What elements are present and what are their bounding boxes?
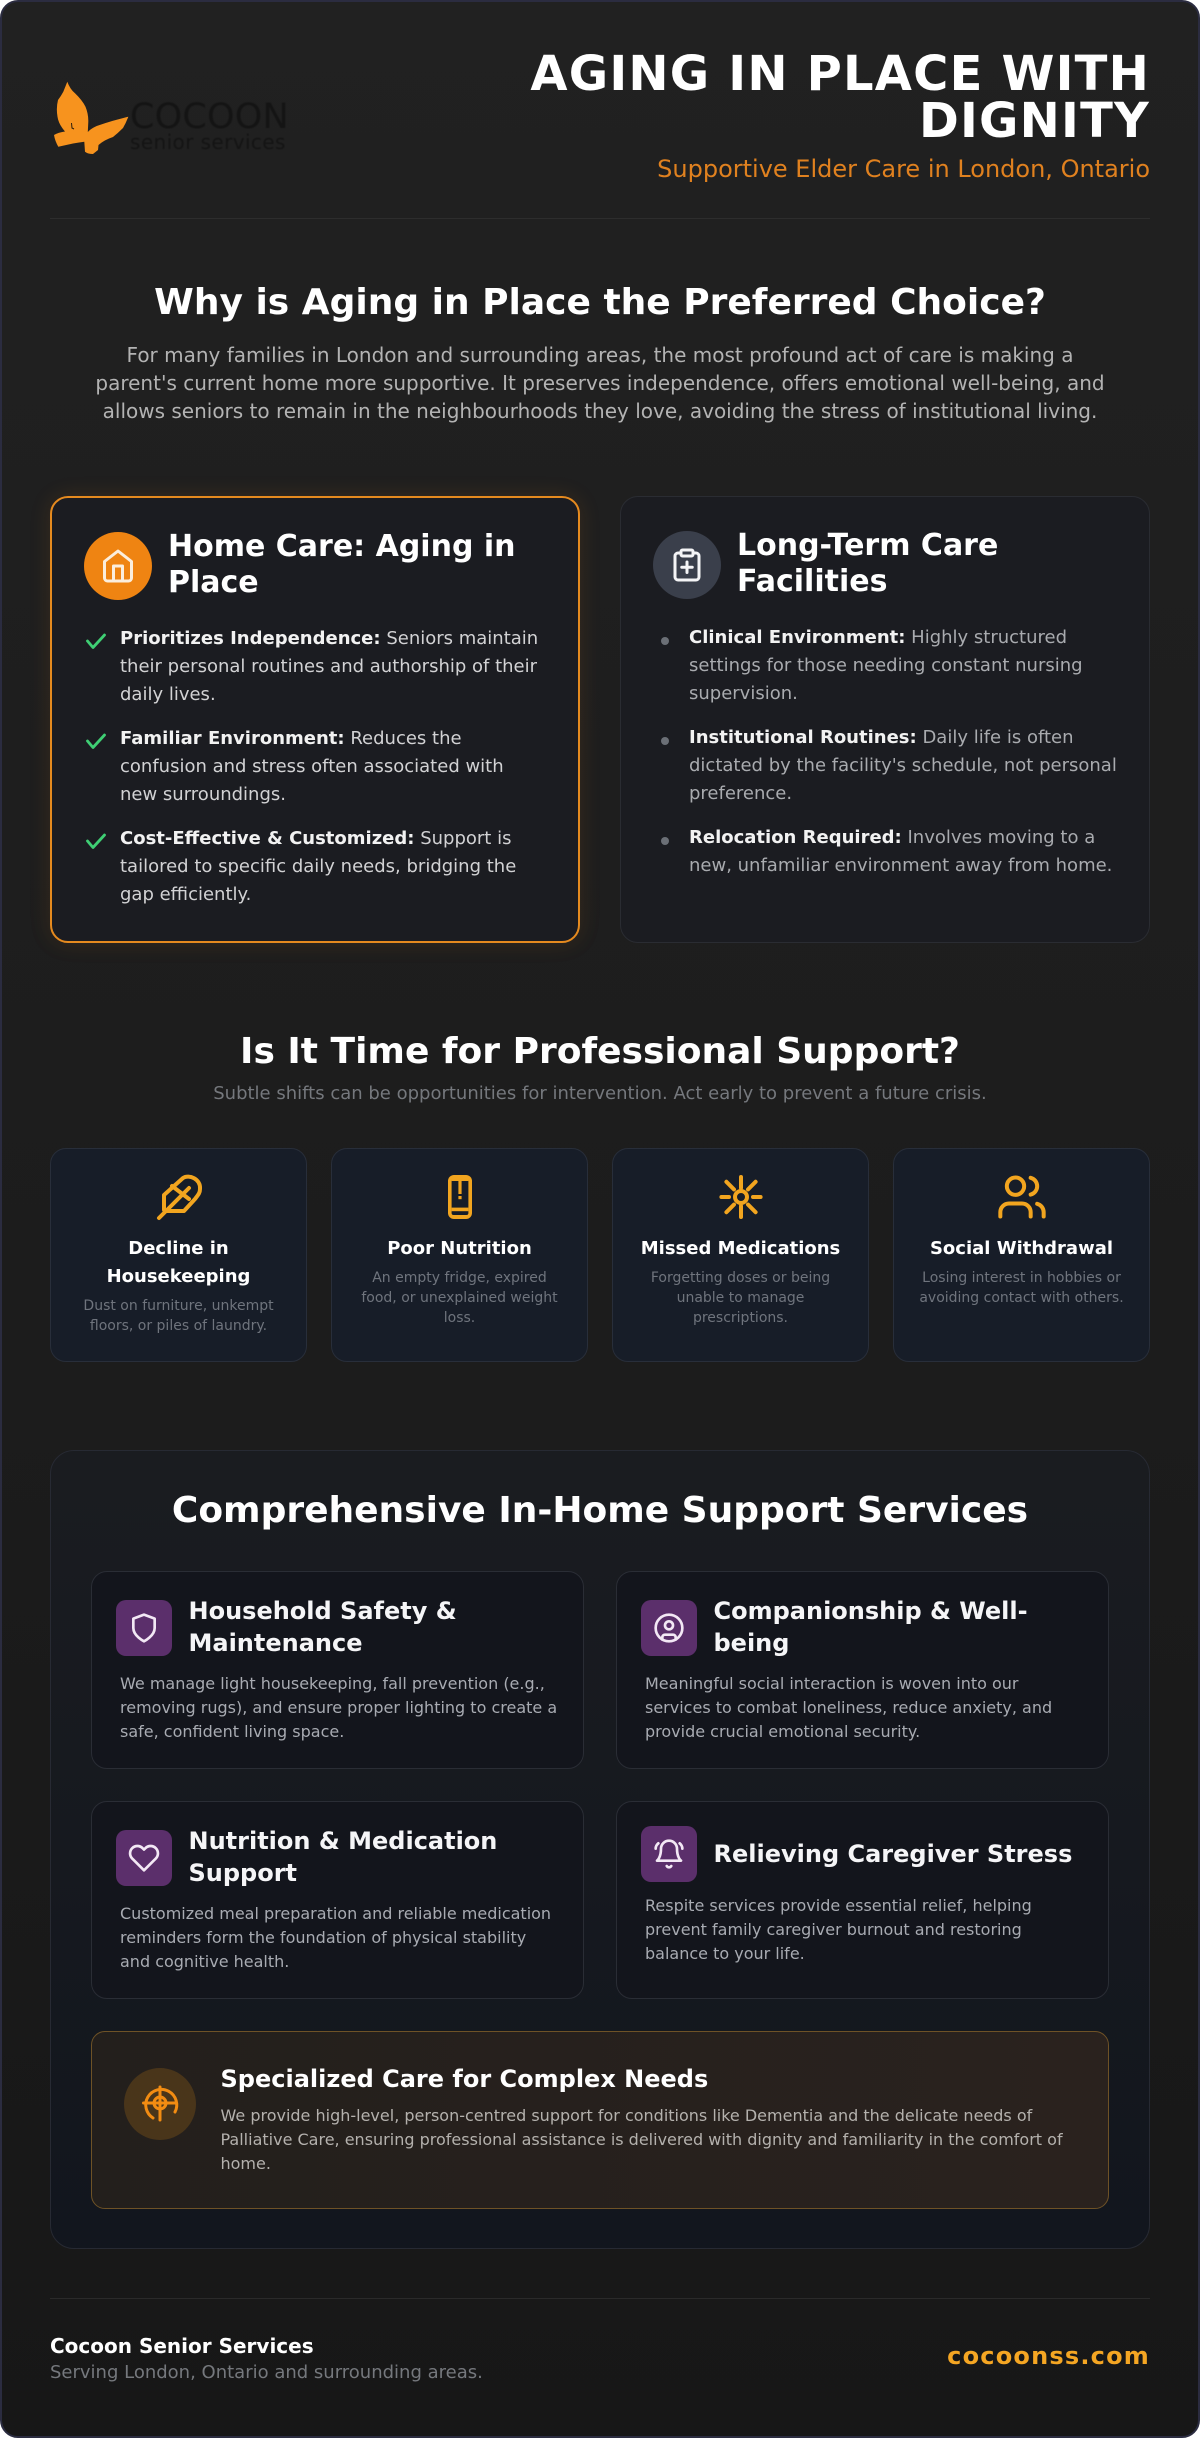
description [919,1270,1124,1306]
drawback: relocation: new, unfamiliar environment away from home. [689,855,1112,876]
description: Losing interest in hobbies or [922,1270,1121,1286]
service card: companionship [616,1571,1109,1769]
icon: orange butterfly [54,82,128,154]
feature card: specialized care [91,2031,1109,2209]
sign card: medications [612,1148,869,1362]
title: Social Withdrawal [930,1238,1113,1259]
description: floors, or piles of laundry. [90,1318,267,1334]
benefit: familiar environment: Familiar Environment: Reduces the [120,728,462,749]
drawback: clinical: Clinical Environment: Highly structured [689,627,1067,648]
description: unable to manage [677,1290,804,1306]
drawback: clinical: settings for those needing constant nursing [689,655,1083,676]
description [120,1904,551,1971]
icon: shield [116,1600,172,1656]
description [645,1896,1032,1963]
benefit: independence: their personal routines and authorship of their [120,656,537,677]
description: Dust on furniture, unkempt [83,1298,274,1314]
heading: home care: Home Care: Aging in [168,528,516,564]
bullet 2 [661,737,669,745]
title [530,46,1150,148]
drawback: relocation: Relocation Required: Involves moving to a [689,827,1095,848]
icon: bell [641,1826,697,1882]
drawback: clinical: supervision. [689,683,798,704]
icon: alert phone [448,1175,472,1219]
description [120,1674,557,1741]
title [107,1238,250,1287]
title: Poor Nutrition [387,1238,532,1259]
title: Relieving Caregiver Stress [714,1840,1072,1868]
description: Forgetting doses or being [651,1270,830,1286]
panel: home care [50,496,580,943]
intro paragraph: allows seniors to remain in the neighbourhoods they love, avoiding the stress of institutional living. [103,398,1097,422]
drawback: routines: preference. [689,783,792,804]
icon: users [998,1176,1046,1218]
bullet 3 [661,837,669,845]
description: We provide high-level, person-centred support for conditions like Dementia and the delicate needs of [220,2106,1032,2124]
benefit: cost-effective: tailored to specific daily needs, bridging the [120,856,516,877]
benefit: cost-effective: gap efficiently. [120,884,251,905]
title [714,1597,1028,1657]
title: Missed Medications [641,1238,840,1259]
description: We manage light housekeeping, fall prevention (e.g., [120,1674,545,1693]
icon: user circle [641,1600,697,1656]
description [361,1270,558,1326]
description: balance to your life. [645,1944,805,1963]
drawback: relocation [689,827,1112,876]
description: reminders form the foundation of physical stability [120,1928,526,1947]
subheading: subtle shifts: Subtle shifts can be opportunities for intervention. Act early to prevent a future crisis. [213,1082,987,1104]
drawback: routines: dictated by the facility's schedule, not personal [689,755,1117,776]
benefit: cost-effective [120,828,516,905]
benefit: independence: Prioritizes Independence: Seniors maintain [120,628,538,649]
description: prevent family caregiver burnout and restoring [645,1920,1022,1939]
heading: long-term care: Facilities [737,564,887,598]
icon: home [84,532,152,600]
title: Companionship & Well- [714,1597,1028,1625]
description: food, or unexplained weight [361,1290,558,1306]
drawback: routines: Institutional Routines: Daily life is often [689,727,1074,748]
heading: home care: Place [168,564,259,600]
heading: professional support: Is It Time for Professional Support? [240,1030,960,1072]
icon: heart [116,1830,172,1886]
intro paragraph: parent's current home more supportive. It preserves independence, offers emotional well-being, and [95,370,1105,394]
description [220,2106,1063,2172]
subtitle: Supportive Elder Care in London, Ontario [657,155,1150,183]
title [188,1597,457,1657]
bullet 1 [661,637,669,645]
benefit: familiar environment: confusion and stress often associated with [120,756,504,777]
description [645,1674,1052,1741]
drawback: clinical [689,627,1083,704]
icon: sun [719,1175,763,1219]
sign card: housekeeping [50,1148,307,1362]
icon: medical crosshair [124,2068,196,2140]
title: Housekeeping [107,1266,250,1287]
description [651,1270,830,1326]
service card: household safety [91,1571,584,1769]
heading: long-term care: Long-Term Care [737,528,998,562]
title: Household Safety & [188,1597,457,1625]
description: services to combat loneliness, reduce anxiety, and [645,1698,1052,1717]
benefit: independence [120,628,538,705]
description: provide crucial emotional security. [645,1722,920,1741]
heading: home care [168,528,516,600]
description: and cognitive health. [120,1952,289,1971]
panel: long-term care [620,496,1150,943]
check icon 2 [86,734,106,749]
description: safe, confident living space. [120,1722,344,1741]
description: removing rugs), and ensure proper lighting to create a [120,1698,557,1717]
description: prescriptions. [693,1310,788,1326]
intro paragraph: For many families in London and surrounding areas, the most profound act of care is making a [127,342,1073,366]
icon: clipboard [653,531,721,599]
description: loss. [444,1310,475,1326]
benefit: cost-effective: Cost-Effective & Customized: Support is [120,828,511,849]
intro paragraph [95,342,1105,422]
title: Decline in [128,1238,229,1259]
title: AGING IN PLACE WITH [530,46,1150,102]
heading: long-term care [737,528,998,598]
heading: services: Comprehensive In-Home Support Services [172,1490,1028,1530]
logo: Cocoon Senior Services [54,82,289,154]
description: Respite services provide essential relief, helping [645,1896,1032,1915]
footer: website: cocoonss.com [947,2342,1150,2370]
description: Customized meal preparation and reliable medication [120,1904,551,1923]
title: Maintenance [188,1629,363,1657]
title: being [714,1629,789,1657]
description: avoiding contact with others. [919,1290,1124,1306]
benefit: familiar environment: new surroundings. [120,784,286,805]
sign card: withdrawal [893,1148,1150,1362]
benefit: familiar environment [120,728,504,805]
footer: service area: Serving London, Ontario and surrounding areas. [50,2362,483,2383]
check icon 3 [86,834,106,849]
title: Nutrition & Medication [188,1827,497,1855]
title: Support [188,1859,297,1887]
service card: nutrition and medication [91,1801,584,1999]
sign card: nutrition [331,1148,588,1362]
description: Palliative Care, ensuring professional assistance is delivered with dignity and familiarity in the comfort of [220,2130,1063,2148]
icon: feather [156,1174,202,1220]
drawback: routines [689,727,1117,804]
logo wordmark: COCOON [130,97,289,137]
description: home. [220,2154,271,2172]
title: Specialized Care for Complex Needs [220,2065,708,2093]
logo tagline: senior services [130,130,286,154]
description [83,1298,274,1334]
check icon 1 [86,634,106,649]
footer: organisation name: Cocoon Senior Services [50,2334,314,2358]
heading: why aging in place: Why is Aging in Place the Preferred Choice? [154,282,1046,323]
title [188,1827,497,1887]
panel: services [50,1450,1150,2249]
description: Meaningful social interaction is woven into our [645,1674,1018,1693]
benefit: independence: daily lives. [120,684,216,705]
title: DIGNITY [919,92,1150,148]
description: An empty fridge, expired [372,1270,547,1286]
service card: caregiver stress [616,1801,1109,1999]
